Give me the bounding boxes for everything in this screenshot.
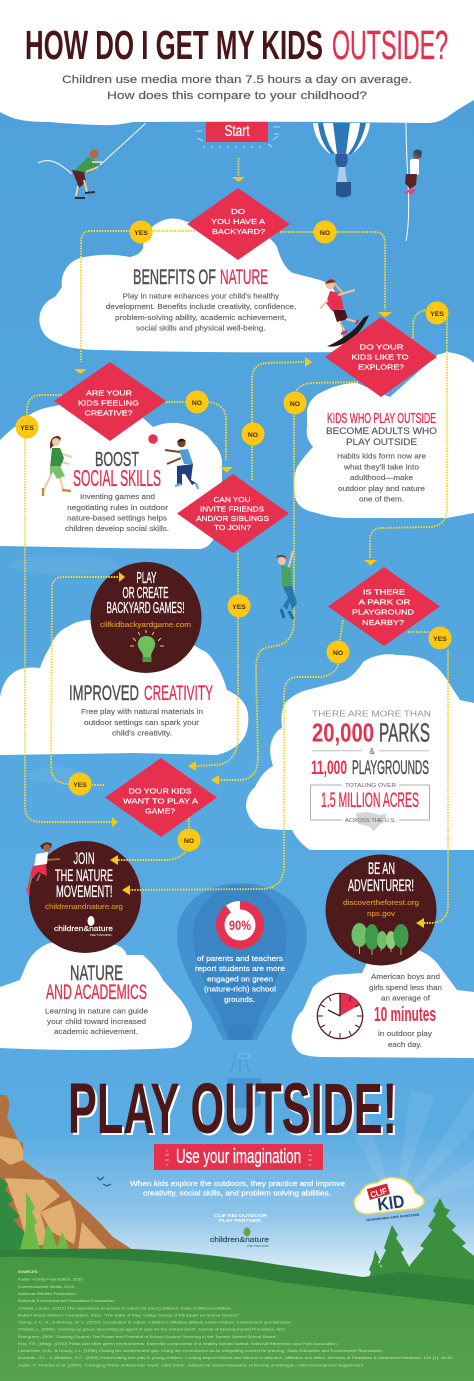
decision: backyard: YOU HAVE A [211,217,266,226]
panel: kids who play outside: BECOME ADULTS WHO [326,426,437,436]
boy on rope [72,150,102,198]
arms [86,162,102,172]
girl playing ball [43,436,72,496]
panel: parks statistics: & [369,747,375,756]
sources: National Environmental Education Foundation [18,1298,114,1303]
arms [165,450,181,464]
callout: join the nature movement: THE NATURE [55,866,113,885]
panel: parks statistics [310,709,431,831]
shirt [326,291,344,311]
game yes to play circle [51,577,118,785]
cloud: nature and academics [0,943,192,1050]
decision: invite: INVITE FRIENDS [200,504,264,514]
big tree [400,1198,474,1305]
shirt [34,852,48,868]
shirt [281,565,292,587]
callout: play or create backyard games: clifkidbackyardgame.com [100,620,191,629]
arm [46,859,60,860]
panel: parks statistics: ACROSS THE U.S. [345,818,396,824]
decision: invite [177,474,289,553]
stat: 90 percent: (nature-rich) school [204,984,276,994]
shorts [405,174,417,189]
shoes [175,483,198,489]
explore yes to park [370,310,447,558]
stat: 90 percent: grounds. [224,995,255,1004]
closing text: When kids explore the outdoors, they practice and improve [130,1179,345,1188]
park yes to adventurer [408,632,448,923]
shirt [50,448,64,468]
yes badge 4 [228,594,250,618]
shorts [30,864,47,878]
sources: Commonsense Media, 2013 [18,1284,74,1289]
start button: Start [224,123,250,140]
no badge 4 [186,390,208,414]
arm [288,551,293,570]
panel: benefits of nature [106,266,296,332]
panel: nature and academics: AND ACADEMICS [46,981,147,1004]
acres box [310,785,430,820]
cloud: header [0,0,474,125]
body: Habits kids form now are [337,452,426,461]
cloud: improved creativity [0,620,248,755]
icon: trees [352,923,408,955]
callout: play or create backyard games: OR CREATE [122,585,168,602]
panel: benefits of nature: social skills and physical well-being. [136,324,266,332]
heading: IMPROVED [69,682,139,705]
balloon basket [228,1078,261,1108]
hair [50,436,61,449]
sources: Chawla, L. (2009). Growing up green: Becoming an agent of care for the natural world. Journal of Developmental Processes, 4(1). [18,1327,286,1332]
partner block: NETWORK [247,1244,269,1248]
balloon hoop [238,1054,250,1058]
balloon neck [229,1025,251,1039]
light trees [20,1192,69,1250]
arms [56,452,72,464]
balloon top envelope [313,123,370,154]
decision: game: GAME? [145,806,175,816]
no badge 6: NO [184,838,194,845]
stat text: of parents and teachers [197,954,283,963]
sources: Juster, F. Thomas et al. (2004). "Changing Times of American Youth: 1981-2003". Institute for Social Research, University of Michigan, Child Development Supplement [18,1362,364,1367]
panel: benefits of nature: NATURE [220,266,268,289]
connectors between decisions [25,158,448,923]
balloon stripes [318,123,366,154]
panel: ten minutes [317,972,442,1049]
decision: creative: CREATIVE? [84,408,132,418]
medium tree [374,1225,410,1290]
arms [320,290,355,309]
head [278,557,286,565]
decision: invite: CAN YOU [214,495,250,504]
climbing boy [276,551,297,619]
head [52,438,60,446]
decision: park [328,567,440,646]
panel: nature and academics: your child toward increased [47,1017,146,1026]
creative yes to game circle [25,395,113,822]
hair [413,150,422,158]
panel: kids who play outside [326,410,437,504]
stat: 90 percent: 90% [229,917,251,933]
head [43,844,51,852]
sources: Chawla, Louise. (2012) The importance of access to nature for young children. Early Childhood Matters. [18,1305,232,1310]
yes badge 5: YES [433,636,447,643]
no badge 6 [178,828,200,852]
shoes [281,609,293,619]
birds [97,1177,111,1186]
pants [283,586,297,610]
yes badge 6 [68,772,92,796]
icon: light bulb [130,630,164,662]
sources: SOURCES: [18,1269,39,1274]
partner leaf [244,1228,250,1236]
callout: be an adventurer: ADVENTURER! [348,876,414,895]
decision: creative: KIDS FEELING [78,398,139,408]
stat: 90 percent: engaged on green [207,974,273,984]
shoes [75,192,95,198]
sky texture smears [10,555,120,783]
back hill [0,1249,474,1320]
decision: game: WANT TO PLAY A [123,796,199,806]
helmet [325,279,336,284]
subtitle: Children use media more than 7.5 hours a day on average. [62,74,412,86]
decision: invite: TO JOIN? [214,523,251,532]
body: Inventing games and [80,492,155,501]
sources [18,1269,454,1367]
ball [148,434,158,444]
rock light faces [0,1136,108,1250]
panel: boost social skills: children develop social skills. [65,524,169,533]
legs [76,180,87,196]
header: How does this compare to your childhood? [107,90,367,102]
decision: park: PLAYGROUND [352,608,415,616]
torso [73,157,100,173]
sources: Kuo, F.E. (Ming). (2010) Parks and other green environments: Essential components of a healthy human habitat. National Recreation and Park Association. [18,1341,338,1346]
shoes [43,488,71,496]
panel: boost social skills [65,449,169,533]
cloud: kids who play outside [294,352,474,518]
callout: be an adventurer: discovertheforest.org [343,898,419,907]
pants [177,464,196,485]
callout: join the nature movement [29,841,141,953]
callout: join the nature movement: childrenandnature.org [45,902,123,911]
game no to join [118,818,189,860]
yes badge 6: YES [73,782,87,789]
yes badge 4: YES [232,604,246,611]
head [413,151,421,159]
imagination banner [154,1144,323,1170]
no badge 4: NO [192,400,202,407]
rope left [38,123,146,174]
panel: ten minutes: an average of [381,994,431,1002]
skateboard [329,316,368,346]
decision: park: A PARK OR [358,598,411,606]
panel: kids who play outside: PLAY OUTSIDE [346,437,417,447]
closing section [68,1070,399,1198]
yes badge 5 [428,626,452,650]
shoes [405,189,415,194]
no badge 3: NO [248,432,258,439]
panel: nature and academics: academic achievement. [54,1027,138,1036]
panel: benefits of nature: development. Benefits include creativity, confidence, [106,302,296,311]
sun rays [340,1090,474,1210]
decision: backyard: BACKYARD? [212,227,265,236]
panel: improved creativity: CREATIVITY [144,682,213,705]
balloon rigging [231,1053,249,1072]
sources: Lieberman, G.A., & Hoody, L.L. (1998) Closing the achievement gap: Using the environment as an integrating context for learning. State Education and Environment Roundtable. [18,1348,383,1353]
no badge 3 [242,422,264,446]
partner block: children&nature [210,1235,269,1244]
connector arrowheads [74,177,424,928]
panel: boost social skills: nature-based settings helps [67,514,167,522]
callout: be an adventurer [326,854,436,966]
panel: ten minutes: girls spend less than [369,983,442,992]
yes badge 2: YES [430,311,444,318]
shorts [333,310,348,322]
map of the U.S. [356,812,387,831]
shirt [179,449,193,464]
body: Free play with natural materials in [81,707,203,716]
skateboarder [320,279,368,346]
creative no to invite [166,402,226,460]
rock formation [0,1095,133,1250]
cloud: boost social skills [0,402,222,549]
callout: play or create backyard games: BACKYARD GAMES! [106,600,184,617]
decision: park: NEARBY? [362,618,404,627]
sources: Kaiser Family Foundation, 2010 [18,1277,84,1282]
legs [339,319,357,332]
logo: clif kid: NOURISHING KIDS IN MOTION [366,1213,420,1222]
partner block: PLAY PARTNER: [219,1218,263,1223]
sources: Evergreen, 2005. "Gaining Ground: The Power and Potential of School Ground Greening in the Toronto District School Board." [18,1334,279,1339]
trees left [0,1177,69,1250]
panel: kids who play outside: adulthood—make [350,473,413,482]
no badge 2: NO [290,401,300,408]
no badge 1 [314,220,336,244]
yes badge 1 [130,220,152,244]
decision: invite: AND/OR SIBLINGS [196,514,269,523]
donut chart [216,901,264,949]
no badge 2 [284,392,306,414]
partner block [210,1213,269,1248]
hair [40,842,52,849]
panel: nature and academics [45,962,148,1036]
invite yes to game [195,553,238,766]
heading: NATURE [70,962,123,985]
hair [334,283,343,293]
panel: parks statistics: TOTALING OVER [345,783,396,789]
panel: improved creativity [69,682,213,738]
panel: kids who play outside: outdoor play and nature [338,484,425,493]
sources: Robert Wood Johnson Foundation, 2010, "The State of Play: Gallup Survey of Principals on School Recess." [18,1312,241,1318]
dark tree [0,1177,34,1250]
sources: Burdette, H.L., & Whitaker, R.C. (2005) Resurrecting free play in young children: Looking beyond fitness and fatness to attention, affiliation and affect. Archives of Pediatrics & Adolescent Medicine, 159 (1), 46-50. [18,1355,454,1360]
logo: children and nature network [54,916,113,937]
decision: park: IS THERE [363,588,405,596]
panel: ten minutes: each day. [388,1040,422,1049]
balloon envelope [177,883,307,1040]
shoes [341,320,358,334]
shorts [72,170,86,188]
yes badge 3 [16,416,38,438]
yes badge 3: YES [20,425,34,432]
panel: boost social skills: SOCIAL SKILLS [73,465,161,491]
park no to movement [130,620,343,890]
panel: benefits of nature: problem-solving ability, academic achievement, [115,313,286,322]
boy playing ball [165,439,198,489]
hair [177,439,186,442]
panel: improved creativity: outdoor settings can spark your [84,718,200,727]
panel: parks statistics: PARKS [379,718,430,748]
stat: 90 percent [195,901,285,1004]
panel: improved creativity: child's creativity. [112,728,172,738]
panel: parks statistics: 20,000 [312,718,374,748]
panel: parks statistics: THERE ARE MORE THAN [312,709,431,719]
heading: BENEFITS OF [133,266,216,289]
logo: children and nature network: NETWORK [90,933,112,937]
decision: game: DO YOUR KIDS [128,786,192,796]
decision: explore [325,317,437,397]
stat: 90 percent: report students are more [195,964,285,973]
body: Play in nature enhances your child's healthy [123,292,280,300]
decision: backyard [187,188,290,260]
panel: ten minutes: in outdoor play [378,1029,432,1038]
decision: explore: DO YOUR [360,342,404,352]
text: American boys and [371,972,440,981]
girl on rope right [405,150,422,194]
cloud: parks and playgrounds [246,654,474,850]
sources: National Wildlife Federation [18,1291,76,1296]
cloud: benefits of nature [39,219,345,352]
panel: boost social skills: negotiating rules in outdoor [67,503,169,512]
callout: join the nature movement: MOVEMENT! [56,882,112,901]
logo: clif kid [354,1178,424,1222]
balloon inner panel [193,885,287,1040]
logo: clif kid: KID [376,1191,406,1215]
no badge 5 [326,640,350,664]
callout: join the nature movement: JOIN [74,849,94,868]
rock shadow [0,1095,133,1250]
heading: BOOST [95,449,139,471]
shorts [50,466,65,479]
callout: play or create backyard games: PLAY [136,570,157,587]
cap [276,555,287,559]
no badge 5: NO [333,650,343,657]
backyard no to explore [280,232,385,310]
invite no to explore [252,362,304,480]
decision: backyard: DO [231,207,245,216]
decision: explore: EXPLORE? [358,362,404,372]
imagination banner: Use your imagination [176,1146,301,1168]
logo: children and nature network: children&nature [54,924,113,933]
backyard yes to creative [81,231,195,362]
decision: creative: ARE YOUR [86,388,133,398]
shoe [27,888,29,895]
logo: clif kid: CLIF [369,1185,388,1200]
shirt [410,159,419,175]
partner block: CLIF KID OUTDOOR [214,1213,268,1218]
panel: kids who play outside: what they'll take into [343,462,419,472]
top decorations [38,123,409,241]
yes badge 2 [426,302,448,324]
cloud: ten minutes [292,950,474,1058]
panel: parks statistics: 11,000 [311,758,347,779]
front hill [0,1257,474,1381]
closing section: creativity, social skills, and problem solving abilities. [143,1188,331,1198]
legs [44,475,63,489]
callout: be an adventurer: nps.gov [367,909,395,918]
balloon: 90 percent background [177,883,307,1108]
decision: creative [54,362,166,441]
trees right [366,1198,474,1305]
balloon top rigging [337,167,347,182]
head [326,280,334,290]
climbing girl [27,842,60,895]
body: Learning in nature can guide [45,1006,148,1016]
no badge 1: NO [320,230,330,237]
balloon top neck [335,154,348,167]
rope right [406,123,409,241]
yes badge 1: YES [134,230,148,237]
explore no to game [218,382,358,780]
callout: be an adventurer: BE AN [368,859,395,878]
small tree [366,1250,384,1285]
start arrow [238,158,240,176]
decision: game [105,758,217,837]
header [25,22,448,102]
callout: play or create backyard games [90,562,202,673]
legs [28,874,40,890]
head [177,439,186,447]
panel: kids who play outside: one of them. [359,495,404,504]
head [90,150,98,158]
decision: explore: KIDS LIKE TO [352,352,409,362]
balloon top basket [336,182,351,198]
icon: clock [317,993,363,1039]
sources: Cheng, J. C. H., & Monroe, M. C. (2010). Connection to nature: Children's affective attitude toward Nature. Environment and Behavior. [18,1320,292,1324]
start button [196,122,280,148]
